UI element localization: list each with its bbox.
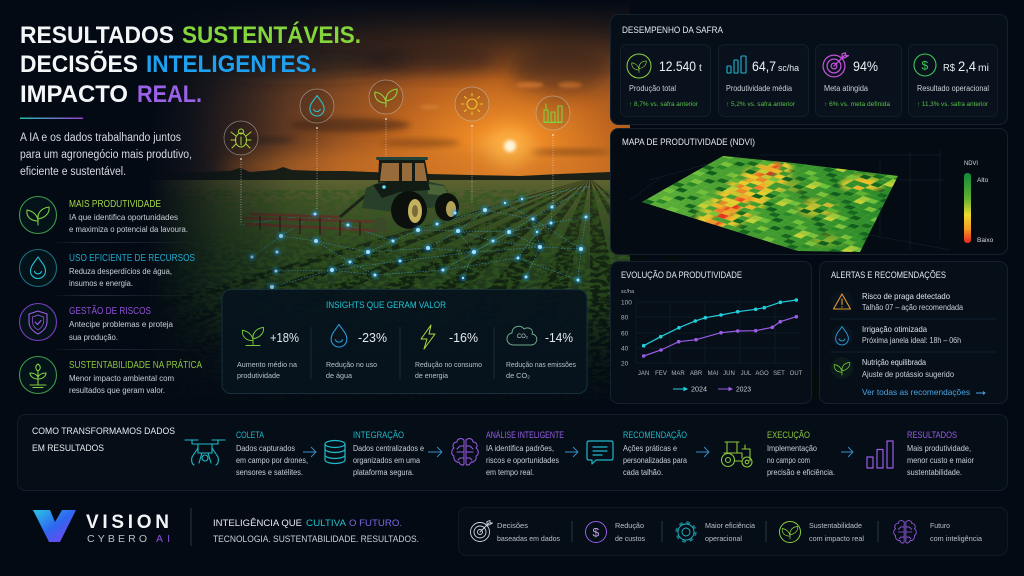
logo: Vision Cybero AI [33,510,170,545]
insight: energia [415,325,482,380]
kpi: meta atingida: ↑ 6% vs. meta definida [824,101,890,108]
insight: produtividade: Aumento médio na [237,360,298,369]
icon: bug [224,121,258,155]
pillar: sustentabilidade [780,521,864,543]
tagline: O FUTURO. [349,518,402,529]
insight: CO2: Redução nas emissões [506,360,576,369]
pillar: redução de custos: de custos [615,534,645,543]
panel: desempenho da safra [610,14,1008,124]
panel: como transformamos dados em resultados: COMO TRANSFORMAMOS DADOS [32,426,175,437]
kpi: meta atingida: Meta atingida [824,84,869,93]
pillar: decisões [470,520,560,543]
tagline: INTELIGÊNCIA QUE [213,518,302,529]
insight: produtividade: +18% [270,330,299,345]
step: resultados: sustentabilidade. [907,468,962,477]
benefit: mais produtividade: MAIS PRODUTIVIDADE [69,199,161,210]
alert: praga: Risco de praga detectado [862,291,950,301]
line chart: 20 [621,360,629,368]
step: coleta: Dados capturados [236,444,295,453]
icon: sun [455,87,489,121]
ndvi heat map [642,156,898,252]
kpi: meta atingida: 94% [853,58,878,74]
title: RESULTADOS [20,22,174,49]
step: análise inteligente: IA identifica padrões, [486,444,554,453]
step: execução: precisão e eficiência. [767,468,835,477]
pillar: eficiência operacional: Maior eficiência [705,521,756,530]
step: análise inteligente: em tempo real. [486,468,534,477]
benefit: sustentabilidade na prática: resultados que geram valor. [69,386,165,395]
benefit: uso eficiente de recursos: insumos e energia. [69,279,133,288]
insight: produtividade: produtividade [237,371,280,380]
pillar: redução de custos: Redução [615,521,644,530]
panel: mapa de produtividade: MAPA DE PRODUTIVIDADE (NDVI) [622,137,755,147]
clouds [190,44,610,155]
panel: insights que geram valor [222,290,587,394]
pillar: futuro com inteligência [894,521,983,543]
step: recomendação: personalizadas para [623,456,687,465]
kpi: produtividade média: sc/ha [778,63,799,73]
step: coleta [185,430,308,477]
panel: alertas e recomendações [820,262,1008,404]
step: coleta: sensores e satélites. [236,468,303,477]
tagline: CULTIVA [306,518,347,529]
panel: como transformamos dados em resultados [18,414,1008,490]
icon: leaf [369,80,403,114]
ndvi legend: NDVI [964,160,978,167]
line chart: sc/ha [621,289,635,295]
pillar: decisões: baseadas em dados [497,534,560,543]
kpi: produção total [620,44,710,116]
line chart: MAR [671,371,685,377]
panel: como transformamos dados em resultados: EM RESULTADOS [32,443,104,454]
benefits list [20,196,210,395]
benefit: gestão de riscos: Antecipe problemas e proteja [69,320,174,329]
line chart: JAN [638,371,649,377]
line chart: AGO [755,371,769,377]
pillar: redução de custos: $ [592,526,600,540]
logo mark [33,510,76,542]
step: execução: Implementação [767,444,817,453]
kpi: produtividade média: 64,7 [752,58,776,74]
insight: água: Redução no uso [326,360,377,369]
series 2023 [642,315,798,358]
icon: water drop [300,89,334,123]
logo: Vision Cybero AI: AI [156,533,170,545]
step: execução [722,430,835,477]
photo fades [0,0,630,410]
step: análise inteligente [452,430,564,477]
arrow [428,447,442,457]
benefit: sustentabilidade na prática: Menor impacto ambiental com [69,374,174,383]
insight: água [326,324,387,380]
ndvi legend: Alto [977,177,989,184]
arrow [303,447,316,457]
kpi: resultado operacional: 2,4 [958,58,976,74]
line chart: OUT [790,371,803,377]
title [20,21,361,108]
crop rows [0,178,850,400]
insight: energia: -16% [449,330,478,345]
logo: Vision Cybero AI: CYBERO [87,533,147,545]
pillar: futuro com inteligência: Futuro [930,521,950,530]
network nodes [250,198,588,289]
dotted connector lines [240,118,554,223]
pillar: sustentabilidade: Sustentabilidade [809,521,862,530]
intro text: A IA e os dados trabalhando juntos [20,132,181,144]
faint surrounding grid [630,150,950,250]
link: ver todas as recomendações: Ver todas as recomendações [862,387,970,397]
alert: praga: Talhão 07 – ação recomendada [862,303,963,312]
alert: irrigação [831,324,961,347]
alert: praga [831,291,963,313]
step: análise inteligente: ANÁLISE INTELIGENTE [486,430,564,440]
tractor with implement [243,157,459,236]
kpi: produtividade média [718,44,808,116]
title: IMPACTO [20,81,128,108]
step: integração: INTEGRAÇÃO [353,430,404,440]
step: coleta: COLETA [236,430,264,440]
title: SUSTENTÁVEIS. [182,21,361,49]
alert: irrigação: Próxima janela ideal: 18h – 06h [862,336,961,345]
kpi: produtividade média: Produtividade média [726,84,792,93]
sun [490,126,530,166]
icon: bar chart [536,96,570,130]
pillar: eficiência operacional: operacional [705,534,742,543]
kpi: produtividade média: ↑ 5,2% vs. safra anterior [726,101,796,108]
panel: alertas e recomendações: ALERTAS E RECOMENDAÇÕES [831,270,946,280]
step: execução: no campo com [767,456,810,465]
pillar: sustentabilidade: com impacto real [809,534,864,543]
insight: água: -23% [358,330,387,345]
icon callouts over photo [224,80,570,223]
ndvi legend: Baixo [977,237,994,244]
step: análise inteligente: riscos e oportunidades [486,456,559,465]
title: REAL. [137,81,202,108]
benefit: mais produtividade [20,196,188,234]
kpi: meta atingida [816,44,902,116]
pillar: redução de custos [586,521,645,543]
alert: irrigação: Irrigação otimizada [862,324,927,334]
step: integração: plataforma segura. [353,468,414,477]
title rule [20,118,83,119]
series 2024 [642,298,798,348]
pillar: futuro com inteligência: com inteligência [930,534,983,543]
arrow [696,447,709,457]
step: resultados: menor custo e maior [907,456,974,465]
benefit: gestão de riscos: GESTÃO DE RISCOS [69,304,151,317]
kpi: resultado operacional: ↑ 11,3% vs. safra anterior [917,101,989,108]
kpi: resultado operacional: Resultado operacional [917,84,989,93]
panel: insights que geram valor: INSIGHTS QUE GERAM VALOR [326,300,446,311]
horizon glow [220,148,640,188]
panel: evolução da produtividade [610,262,812,404]
step: resultados: Mais produtividade, [907,444,971,453]
insight: energia: Redução no consumo [415,360,482,369]
benefit: sustentabilidade na prática: SUSTENTABILIDADE NA PRÁTICA [69,358,202,371]
chart legend [673,386,751,394]
intro text [20,132,192,178]
network mesh [240,186,590,287]
benefit: gestão de riscos: sua produção. [69,333,118,342]
step: execução: EXECUÇÃO [767,430,810,440]
kpi: produção total: ↑ 8,7% vs. safra anterior [629,101,699,108]
title: DECISÕES [20,50,138,78]
kpi: resultado operacional: R$ [943,63,955,74]
step: coleta: em campo por drones, [236,456,308,465]
line chart: MAI [708,371,719,377]
line chart: 80 [621,314,629,322]
step: resultados: RESULTADOS [907,430,957,440]
kpi: resultado operacional: $ [922,58,928,72]
foliage texture [150,190,630,400]
intro text: eficiente e sustentável. [20,166,126,178]
sunset sky [150,0,630,182]
pillar: eficiência operacional [676,521,756,543]
line chart: 100 [621,300,632,306]
step: recomendação: RECOMENDAÇÃO [623,430,687,440]
logo: Vision Cybero AI: VISION [86,512,169,533]
kpi: resultado operacional [908,44,998,116]
step: integração: Dados centralizados e [353,444,424,453]
alert: nutrição: Nutrição equilibrada [862,357,926,367]
kpi: resultado operacional: mi [978,63,989,74]
kpi: produção total: t [699,63,702,74]
panel: mapa de produtividade [610,128,1008,254]
pillar: decisões: Decisões [497,521,528,530]
tagline: TECNOLOGIA. SUSTENTABILIDADE. RESULTADOS. [213,534,419,544]
step: integração: organizados em uma [353,456,420,465]
line chart [621,289,803,377]
ndvi legend [964,160,994,244]
benefit: uso eficiente de recursos: USO EFICIENTE DE RECURSOS [69,253,195,264]
line chart: SET [773,371,785,377]
panel: pilares [458,508,1008,556]
alert: nutrição: Ajuste de potássio sugerido [862,370,955,379]
step: recomendação: Ações práticas e [623,444,678,453]
line chart: 60 [621,330,629,338]
chart legend: 2023 [736,386,751,394]
benefit: uso eficiente de recursos [20,250,195,288]
insight: CO2: CO₂ [517,333,528,340]
line chart: 40 [621,346,629,352]
line chart: JUN [723,371,735,377]
insight: CO2 [506,326,576,380]
tagline [213,518,419,544]
insight: produtividade [237,327,299,380]
arrow [841,447,853,457]
panel: desempenho da safra: DESEMPENHO DA SAFRA [622,25,723,35]
benefit: sustentabilidade na prática [20,356,202,395]
benefit: uso eficiente de recursos: Reduza desperdícios de água, [69,267,172,276]
field [150,178,630,408]
benefit: gestão de riscos [20,304,174,342]
kpi: produção total: Produção total [629,84,676,93]
step: recomendação [587,430,687,477]
alert: nutrição [831,357,955,379]
insight: CO2: de CO₂ [506,371,530,380]
arrow [565,447,578,457]
chart legend: 2024 [691,386,707,394]
line chart: JUL [741,371,752,377]
step: recomendação: cada talhão. [623,468,663,477]
line chart: ABR [690,371,703,377]
insight: CO2: -14% [545,330,573,345]
benefit: mais produtividade: IA que identifica oportunidades [69,213,178,222]
insight: energia: de energia [415,371,449,380]
step: resultados [867,430,974,477]
kpi: produção total: 12.540 [659,58,696,74]
tree line [150,167,610,180]
background photo: tractor in field at sunset [0,0,850,410]
benefit: mais produtividade: e maximiza o potencial da lavoura. [69,225,188,234]
insight: água: de água [326,371,353,380]
line chart: FEV [655,371,667,377]
panel: evolução da produtividade: EVOLUÇÃO DA PRODUTIVIDADE [621,270,742,280]
intro text: para um agronegócio mais produtivo, [20,149,192,161]
step: integração [325,430,424,477]
title: INTELIGENTES. [146,51,317,78]
